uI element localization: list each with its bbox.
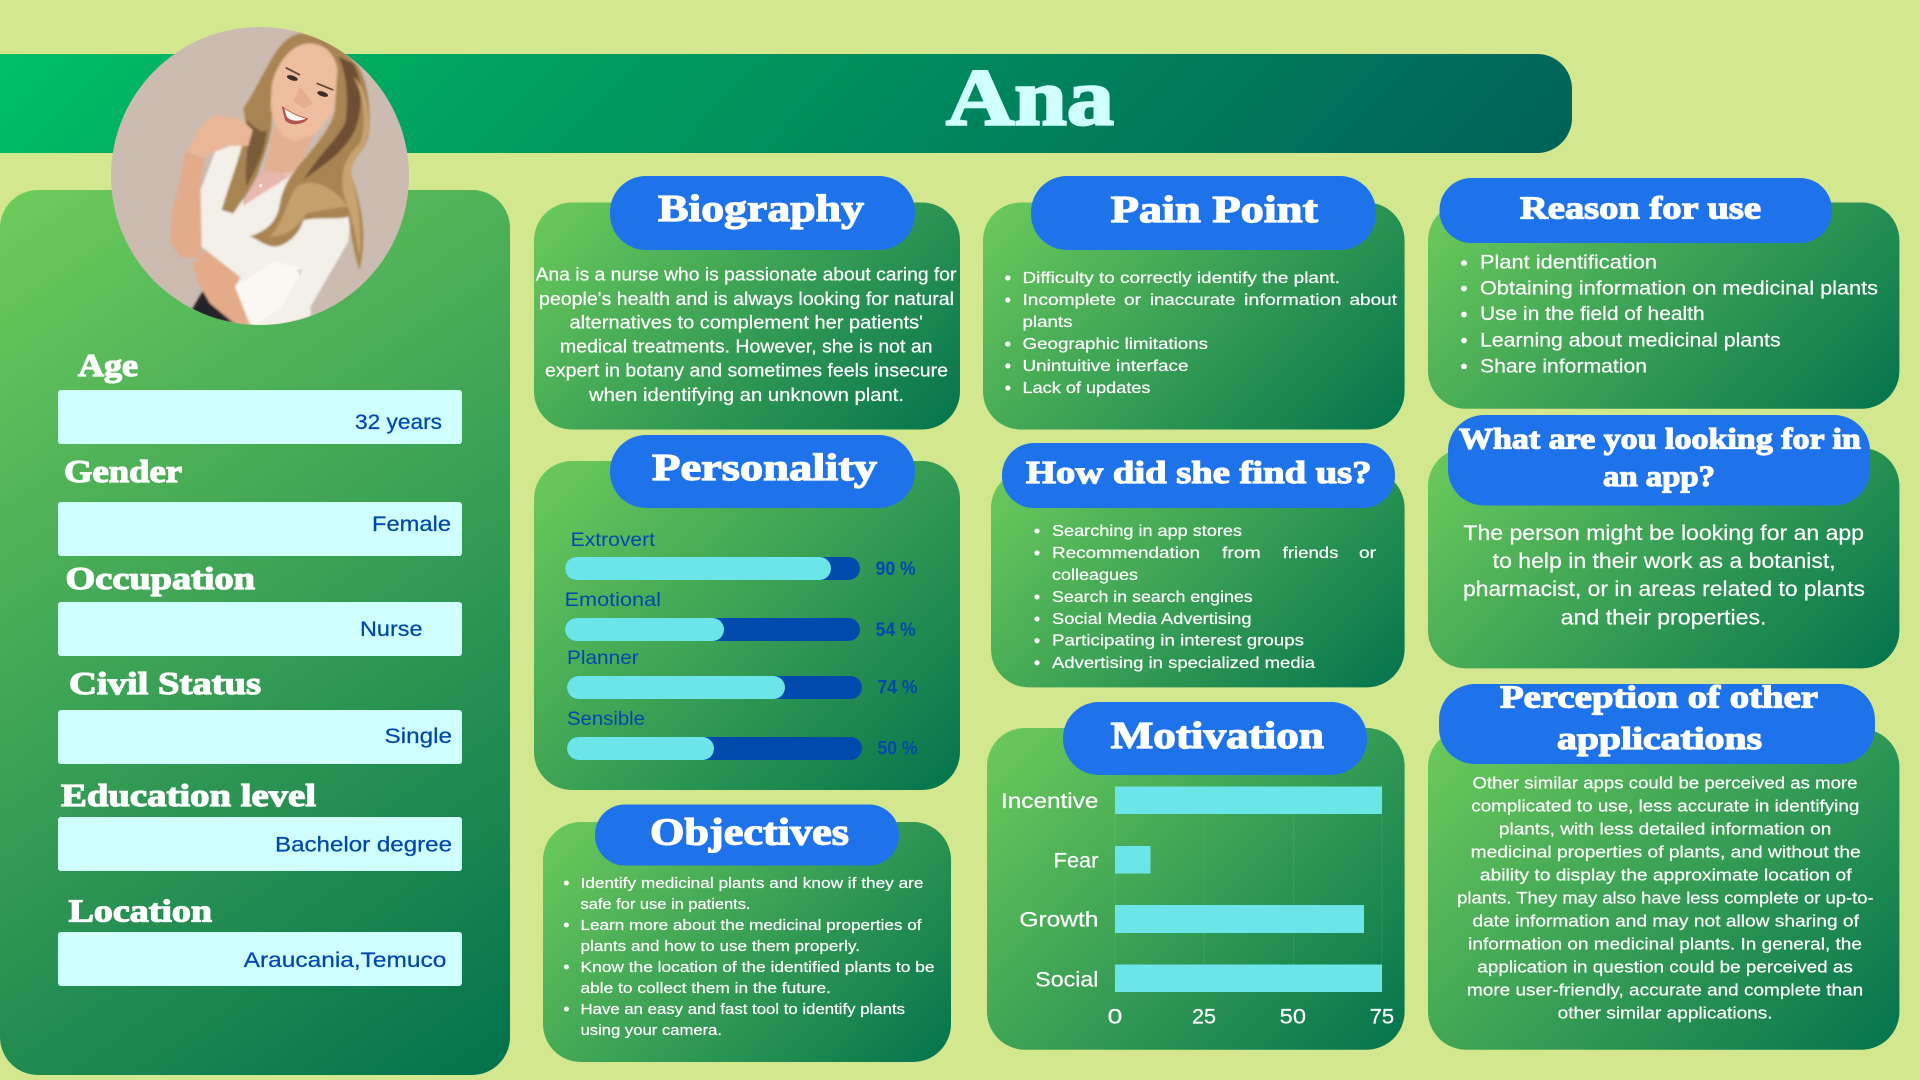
heading pill: Personality: Personality (652, 447, 877, 489)
pain point list: Lack of updates (1022, 380, 1150, 397)
bar chart: motivation levels: 25 (1192, 1006, 1216, 1028)
perception text (1457, 774, 1874, 1023)
objectives list: Identify medicinal plants and know if they are (580, 875, 924, 892)
slider: emotional 54%: 54 % (876, 620, 916, 641)
panel: what are you looking for in an app (1428, 415, 1899, 668)
slider: sensible 50% (567, 709, 918, 760)
bar chart: motivation levels: Social (1035, 968, 1098, 991)
panel: reason for use (1428, 178, 1899, 409)
heading pill: Pain Point (1031, 176, 1376, 250)
app expectations text: The person might be looking for an app (1463, 522, 1864, 545)
heading pill: Motivation: Motivation (1111, 715, 1324, 757)
objectives list: able to collect them in the future. (580, 980, 831, 997)
pain point list: Geographic limitations (1022, 336, 1208, 353)
slider: sensible 50%: 50 % (878, 738, 918, 760)
biography text: expert in botany and sometimes feels insecure (545, 361, 948, 381)
field: education level (58, 777, 462, 871)
field: civil status (58, 665, 462, 764)
field: gender (58, 453, 462, 556)
pain point list: plants (1022, 314, 1072, 331)
discovery channels list: from (1222, 545, 1261, 562)
field: occupation: Nurse (360, 618, 422, 641)
field: location (58, 892, 462, 986)
heading pill: Personality (610, 435, 915, 508)
discovery channels list: Advertising in specialized media (1052, 655, 1315, 672)
bar chart: motivation levels: Growth (1019, 908, 1098, 931)
field: education level: Bachelor degree (275, 834, 452, 857)
panel: personality (534, 435, 960, 790)
heading pill: Reason for use (1440, 178, 1832, 243)
field: civil status: Civil Status (69, 665, 261, 701)
heading pill: What are you looking for in an app?: What are you looking for in (1459, 423, 1861, 456)
heading pill: Perception of other applications: Perception of other (1500, 679, 1818, 715)
panel: perception of other applications (1428, 679, 1899, 1050)
discovery channels list: Participating in interest groups (1052, 633, 1304, 650)
bar chart: motivation levels: Fear (1054, 850, 1098, 872)
title: Ana: Ana (946, 52, 1114, 142)
biography text: Ana is a nurse who is passionate about caring for (536, 265, 956, 285)
biography text: medical treatments. However, she is not an (560, 337, 932, 357)
perception text: medicinal properties of plants, and without the (1471, 843, 1861, 862)
pain point list (1005, 270, 1398, 397)
field: age (58, 347, 462, 444)
biography text (536, 265, 956, 405)
reasons list: Share information (1480, 357, 1647, 378)
objectives list: Know the location of the identified plants to be (580, 959, 934, 976)
field: gender: Gender (64, 453, 182, 489)
discovery channels list: or (1359, 545, 1377, 562)
field: age: Age (78, 347, 138, 383)
objectives list: plants and how to use them properly. (580, 938, 860, 955)
heading pill: What are you looking for in an app?: an app? (1603, 460, 1715, 493)
perception text: information on medicinal plants. In general, the (1468, 935, 1862, 954)
photo: portrait of Ana (111, 27, 409, 328)
heading pill: Perception of other applications (1439, 679, 1875, 764)
app expectations text: pharmacist, or in areas related to plants (1463, 578, 1865, 601)
biography text: people's health and is always looking for natural (539, 289, 954, 309)
objectives list (564, 875, 934, 1039)
app expectations text (1463, 522, 1865, 629)
discovery channels list: Social Media Advertising (1052, 611, 1252, 628)
field: location: Location (69, 892, 212, 928)
pain point list: Difficulty to correctly identify the plant. (1022, 270, 1340, 287)
field: occupation: Occupation (66, 560, 255, 596)
perception text: Other similar apps could be perceived as more (1472, 774, 1858, 793)
slider: planner 74% (567, 648, 918, 699)
bar chart: motivation levels: 0 (1108, 1006, 1122, 1028)
panel: biography (534, 176, 960, 430)
heading pill: Perception of other applications: applications (1557, 720, 1762, 756)
perception text: other similar applications. (1558, 1004, 1773, 1023)
slider: extrovert 90% (565, 530, 916, 580)
heading pill: Motivation (1063, 702, 1367, 775)
discovery channels list (1034, 523, 1377, 672)
panel: pain point (983, 176, 1405, 430)
heading pill: Objectives: Objectives (650, 812, 849, 854)
pain point list: about (1350, 292, 1398, 309)
pain point list: inaccurate (1150, 292, 1236, 309)
slider: extrovert 90%: 90 % (876, 559, 916, 580)
slider: extrovert 90%: Extrovert (571, 530, 656, 551)
heading pill: Biography: Biography (658, 188, 864, 230)
slider: planner 74%: Planner (567, 648, 639, 669)
slider: emotional 54% (565, 590, 916, 641)
field: occupation (58, 560, 462, 656)
panel: how did she find us (991, 443, 1405, 687)
perception text: date information and may not allow sharing of (1472, 912, 1859, 931)
field: civil status: Single (384, 725, 452, 748)
objectives list: safe for use in patients. (580, 896, 750, 913)
app expectations text: to help in their work as a botanist, (1493, 550, 1836, 573)
perception text: more user-friendly, accurate and complete than (1467, 981, 1863, 1000)
heading pill: How did she find us? (1002, 443, 1395, 508)
objectives list: using your camera. (580, 1022, 722, 1039)
perception text: complicated to use, less accurate in identifying (1471, 797, 1859, 816)
objectives list: Learn more about the medicinal properties of (580, 917, 922, 934)
discovery channels list: Search in search engines (1052, 589, 1253, 606)
panel: profile details (0, 190, 510, 1075)
biography text: alternatives to complement her patients' (570, 312, 923, 332)
discovery channels list: Searching in app stores (1052, 523, 1242, 540)
heading pill: Reason for use: Reason for use (1520, 190, 1761, 226)
pain point list: Incomplete (1022, 292, 1116, 309)
field: education level: Education level (61, 777, 316, 813)
bar chart: motivation levels: 50 (1280, 1006, 1306, 1028)
heading pill: Biography (610, 176, 915, 250)
discovery channels list: colleagues (1052, 567, 1138, 584)
slider: planner 74%: 74 % (878, 678, 918, 699)
reasons list: Learning about medicinal plants (1480, 330, 1781, 351)
panel: objectives (543, 804, 951, 1062)
reasons list (1461, 253, 1878, 378)
reasons list: Use in the field of health (1480, 304, 1705, 325)
bar chart: motivation levels: Incentive (1001, 790, 1098, 813)
field: location: Araucania,Temuco (244, 949, 446, 972)
face details (259, 68, 333, 277)
field: age: 32 years (355, 411, 442, 434)
perception text: application in question could be perceived as (1477, 958, 1853, 977)
reasons list: Obtaining information on medicinal plants (1480, 278, 1878, 299)
slider: sensible 50%: Sensible (567, 709, 645, 730)
field: gender: Female (372, 513, 451, 536)
app expectations text: and their properties. (1561, 606, 1766, 629)
discovery channels list: friends (1283, 545, 1338, 562)
bar chart: motivation levels: 75 (1370, 1006, 1394, 1028)
objectives list: Have an easy and fast tool to identify plants (580, 1001, 905, 1018)
reasons list: Plant identification (1480, 253, 1657, 274)
slider: emotional 54%: Emotional (565, 590, 661, 611)
perception text: plants, with less detailed information on (1499, 820, 1831, 839)
bar chart: motivation levels (1001, 786, 1394, 1028)
perception text: ability to display the approximate location of (1480, 866, 1852, 885)
perception text: plants. They may also have less complete or up-to- (1457, 889, 1874, 908)
heading pill: How did she find us?: How did she find us? (1026, 454, 1372, 490)
pain point list: Unintuitive interface (1022, 358, 1189, 375)
pain point list: or (1124, 292, 1142, 309)
discovery channels list: Recommendation (1052, 545, 1200, 562)
pain point list: information (1244, 292, 1342, 309)
biography text: when identifying an unknown plant. (588, 385, 904, 405)
heading pill: What are you looking for in an app? (1448, 415, 1870, 506)
panel: motivation (987, 702, 1405, 1050)
title banner (0, 52, 1572, 153)
heading pill: Pain Point: Pain Point (1111, 189, 1318, 231)
heading pill: Objectives (595, 804, 899, 866)
